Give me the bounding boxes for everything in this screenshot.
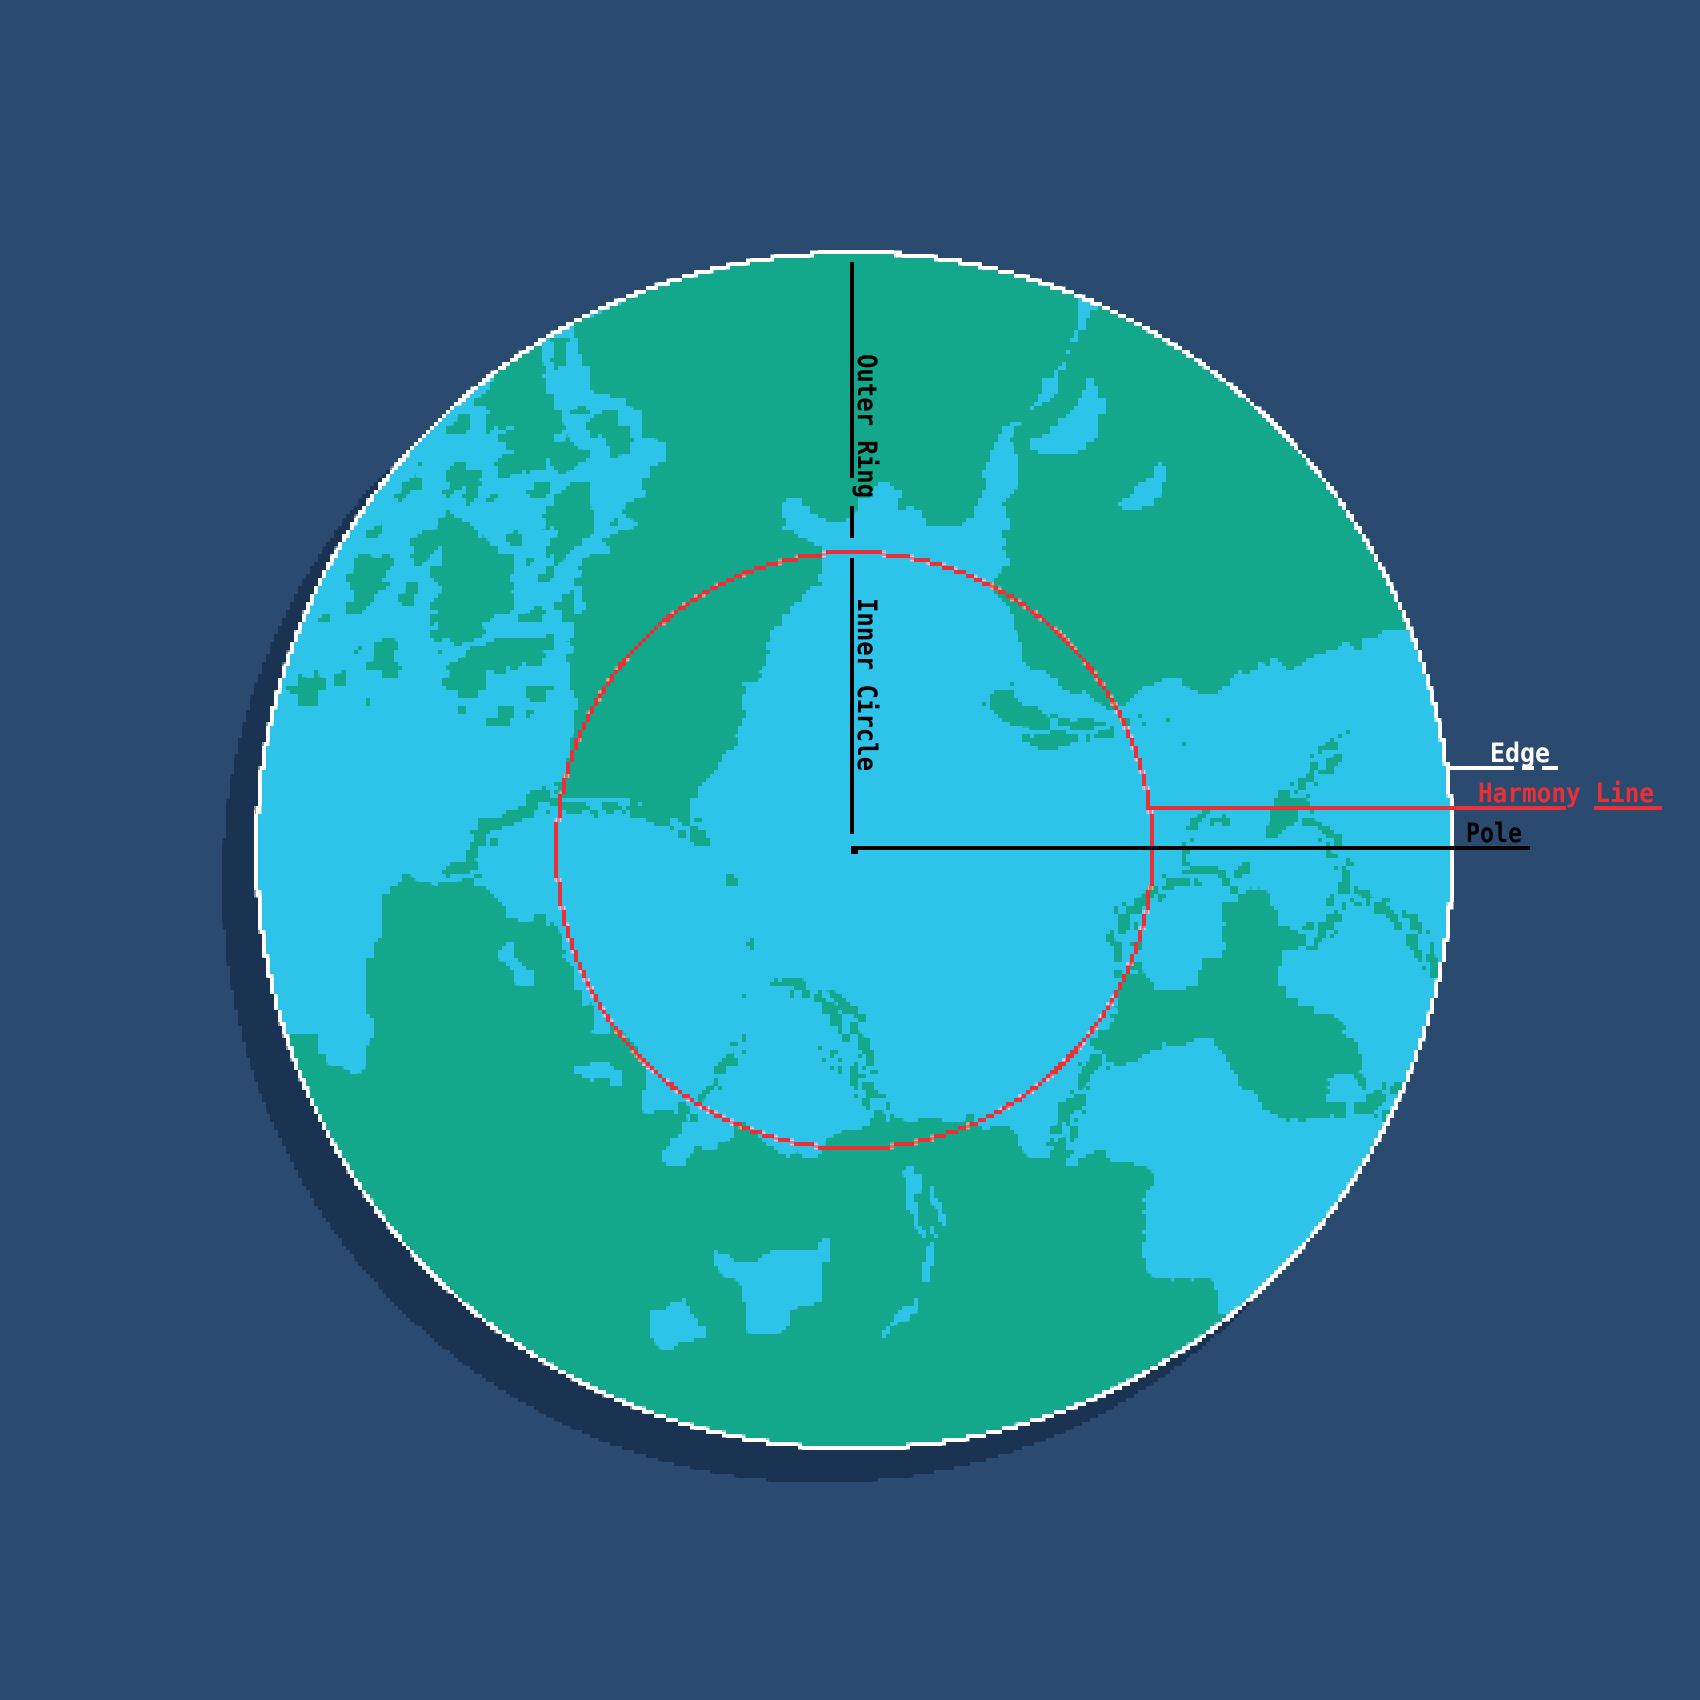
edge callout xyxy=(1446,738,1558,770)
outer ring label: Outer Ring xyxy=(851,354,882,498)
pole label: Pole xyxy=(1466,818,1522,849)
inner circle label: Inner Circle xyxy=(851,598,882,771)
inner circle leader xyxy=(850,558,882,854)
harmony line label: Harmony Line xyxy=(1478,778,1654,809)
harmony line callout xyxy=(1150,778,1662,810)
polar map infographic xyxy=(222,250,1662,1482)
pixelated globe with shadow xyxy=(222,240,1480,1482)
pole callout xyxy=(854,818,1530,850)
outer ring leader xyxy=(850,262,882,538)
disc drop shadow xyxy=(222,282,1422,1482)
inner harmony circle xyxy=(556,552,1152,1148)
map disc xyxy=(240,240,1480,1460)
disc outline: edge xyxy=(256,252,1452,1448)
edge label: Edge xyxy=(1490,738,1550,769)
